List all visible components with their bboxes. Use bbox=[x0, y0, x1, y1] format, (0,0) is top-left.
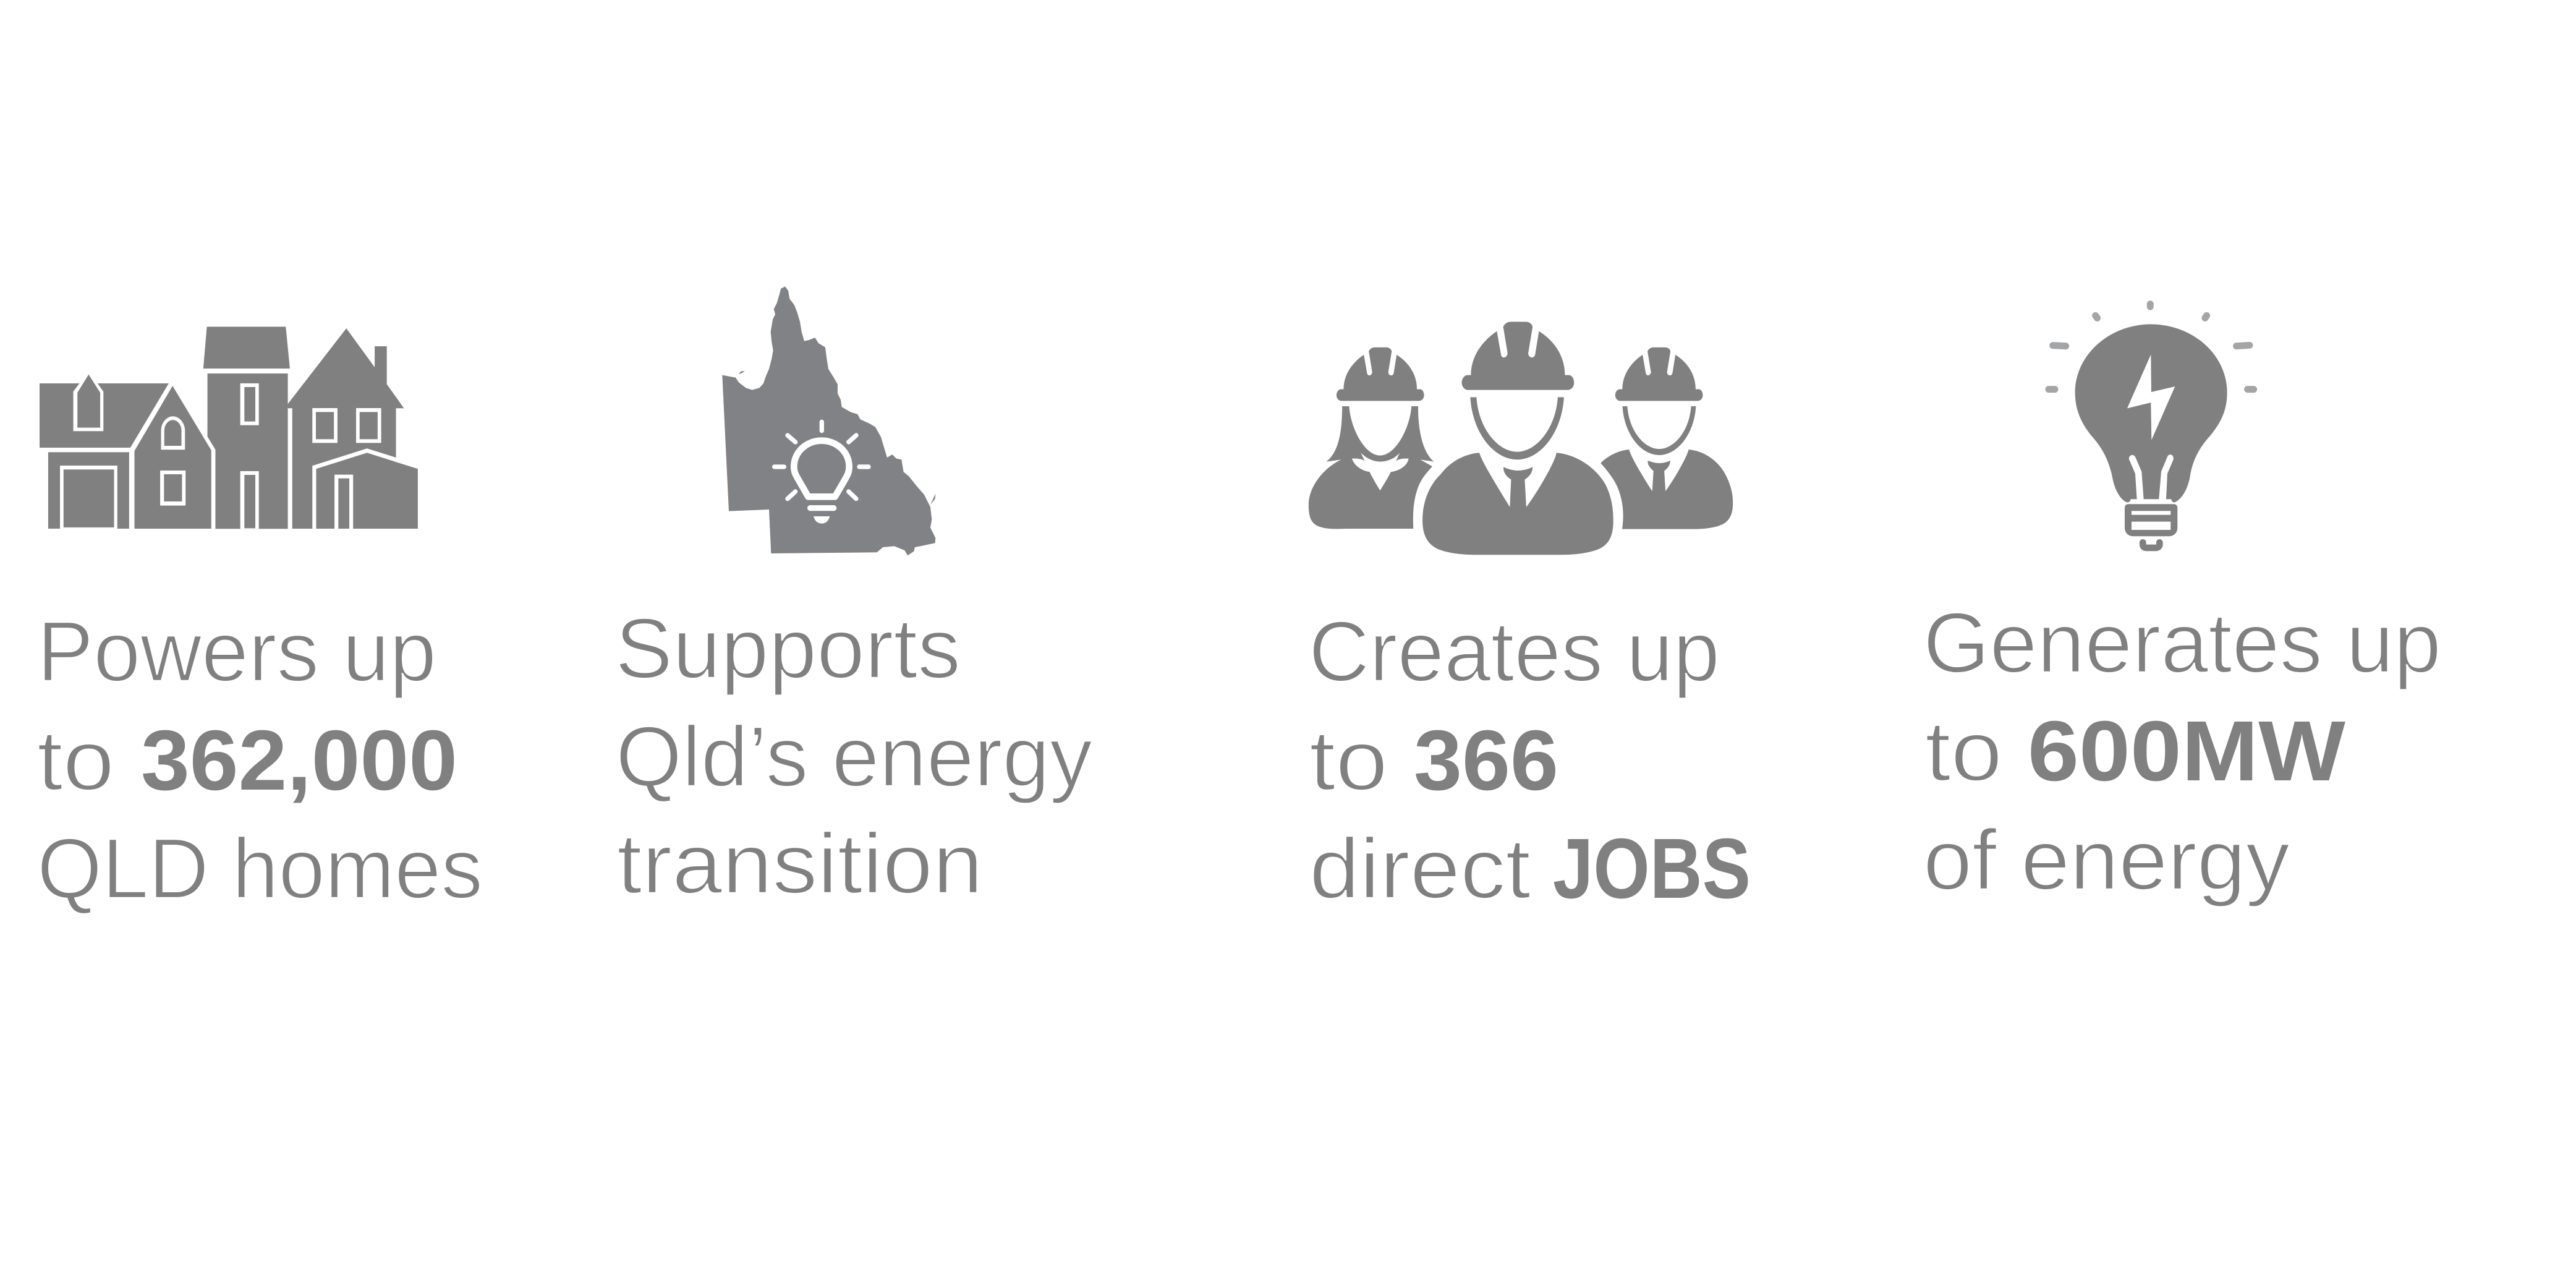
panel: jobs created bbox=[1309, 322, 1751, 916]
text: Powers up to 362,000 QLD homes bbox=[37, 604, 483, 916]
text: Powers up to 362,000 QLD homes: QLD homes bbox=[37, 821, 483, 916]
text: Generates up to 600MW of energy: 600MW bbox=[2028, 704, 2346, 799]
text: Generates up to 600MW of energy: Generates up bbox=[1923, 595, 2441, 691]
text: Generates up to 600MW of energy: to bbox=[1925, 704, 2002, 799]
panel: energy generated bbox=[1923, 304, 2441, 908]
text: Powers up to 362,000 QLD homes: to bbox=[37, 713, 114, 808]
icon: light bulb with lightning bolt bbox=[2049, 304, 2254, 548]
man worker centre bbox=[1422, 322, 1613, 555]
text: Creates up to 366 direct JOBS: Creates up bbox=[1309, 604, 1720, 699]
text: Creates up to 366 direct JOBS: 366 bbox=[1414, 713, 1558, 808]
text: Supports Qld's energy transition: Qld’s energy bbox=[616, 709, 1092, 804]
text: Supports Qld's energy transition: Supports bbox=[615, 601, 961, 696]
panel: homes powered bbox=[37, 326, 483, 916]
text: Generates up to 600MW of energy: of energy bbox=[1923, 812, 2290, 908]
icon: row of houses bbox=[40, 326, 418, 529]
text: Creates up to 366 direct JOBS: JOBS bbox=[1553, 821, 1751, 916]
icon: Queensland map with light bulb bbox=[722, 286, 935, 555]
text: Creates up to 366 direct JOBS bbox=[1309, 604, 1751, 916]
text: Creates up to 366 direct JOBS: to bbox=[1309, 713, 1388, 808]
woman worker bbox=[1309, 348, 1434, 529]
text: Supports Qld's energy transition bbox=[615, 601, 1092, 911]
panel: energy transition bbox=[615, 286, 1092, 911]
text: Supports Qld's energy transition: transition bbox=[617, 816, 983, 911]
text: Generates up to 600MW of energy bbox=[1923, 595, 2441, 908]
bulb rays bbox=[2049, 304, 2254, 390]
man worker right bbox=[1600, 348, 1733, 529]
text: Powers up to 362,000 QLD homes: Powers up bbox=[37, 604, 436, 699]
text: Creates up to 366 direct JOBS: direct bbox=[1309, 821, 1531, 916]
icon: three workers in hard hats bbox=[1309, 322, 1733, 555]
text: Powers up to 362,000 QLD homes: 362,000 bbox=[141, 713, 457, 808]
